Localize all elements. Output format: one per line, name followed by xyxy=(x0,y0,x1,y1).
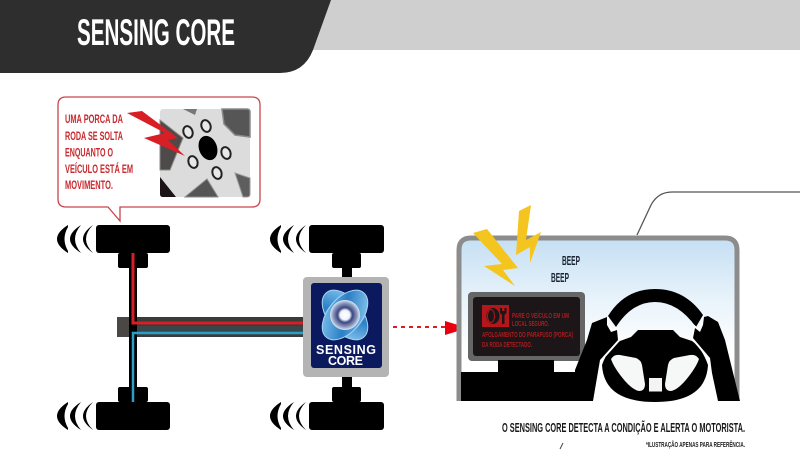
logo text: SENSING xyxy=(316,343,376,357)
warning text: DA RODA DETECTADO. xyxy=(482,340,532,349)
beep text xyxy=(551,254,580,285)
title: SENSING CORE xyxy=(77,12,235,53)
beep text: BEEP xyxy=(562,254,580,268)
callout text: RODA SE SOLTA xyxy=(65,131,123,143)
callout text: VEÍCULO ESTÁ EM xyxy=(65,163,133,176)
warning text xyxy=(482,311,573,349)
windshield xyxy=(459,205,740,402)
sensing core unit xyxy=(303,277,389,377)
icon: yellow lightning bolts xyxy=(473,205,541,286)
hands xyxy=(575,316,740,401)
icon: wheel and wrench xyxy=(482,305,509,327)
warning display xyxy=(468,292,585,361)
warning text: PARE O VEÍCULO EM UM xyxy=(512,311,569,320)
chassis diagram xyxy=(57,225,389,430)
lower connector line xyxy=(560,443,563,449)
red sensor line xyxy=(133,253,310,323)
sound waves xyxy=(57,225,306,430)
callout text: UMA PORCA DA xyxy=(65,114,123,126)
logo text: CORE xyxy=(328,354,363,368)
header xyxy=(0,0,800,73)
logo text xyxy=(316,343,376,368)
callout text: MOVIMENTO. xyxy=(65,180,113,192)
callout: loose wheel nut xyxy=(58,97,260,221)
callout text: ENQUANTO O xyxy=(65,148,113,160)
warning text: AFOLGAMENTO DO PARAFUSO (PORCA) xyxy=(482,330,573,339)
warning text: LOCAL SEGURO. xyxy=(512,319,549,328)
steering wheel xyxy=(602,289,708,402)
wheels and axles xyxy=(96,225,384,430)
sensing core logo xyxy=(313,282,377,348)
dashboard base xyxy=(461,360,580,401)
connector line xyxy=(637,192,800,235)
arrow: dotted red xyxy=(393,321,458,335)
callout text xyxy=(65,114,133,192)
icon: red lightning bolt xyxy=(127,111,185,156)
beep text: BEEP xyxy=(551,271,569,285)
blue sensor line xyxy=(133,333,310,402)
wheel photo xyxy=(160,109,250,197)
centre drive bar xyxy=(117,317,303,337)
